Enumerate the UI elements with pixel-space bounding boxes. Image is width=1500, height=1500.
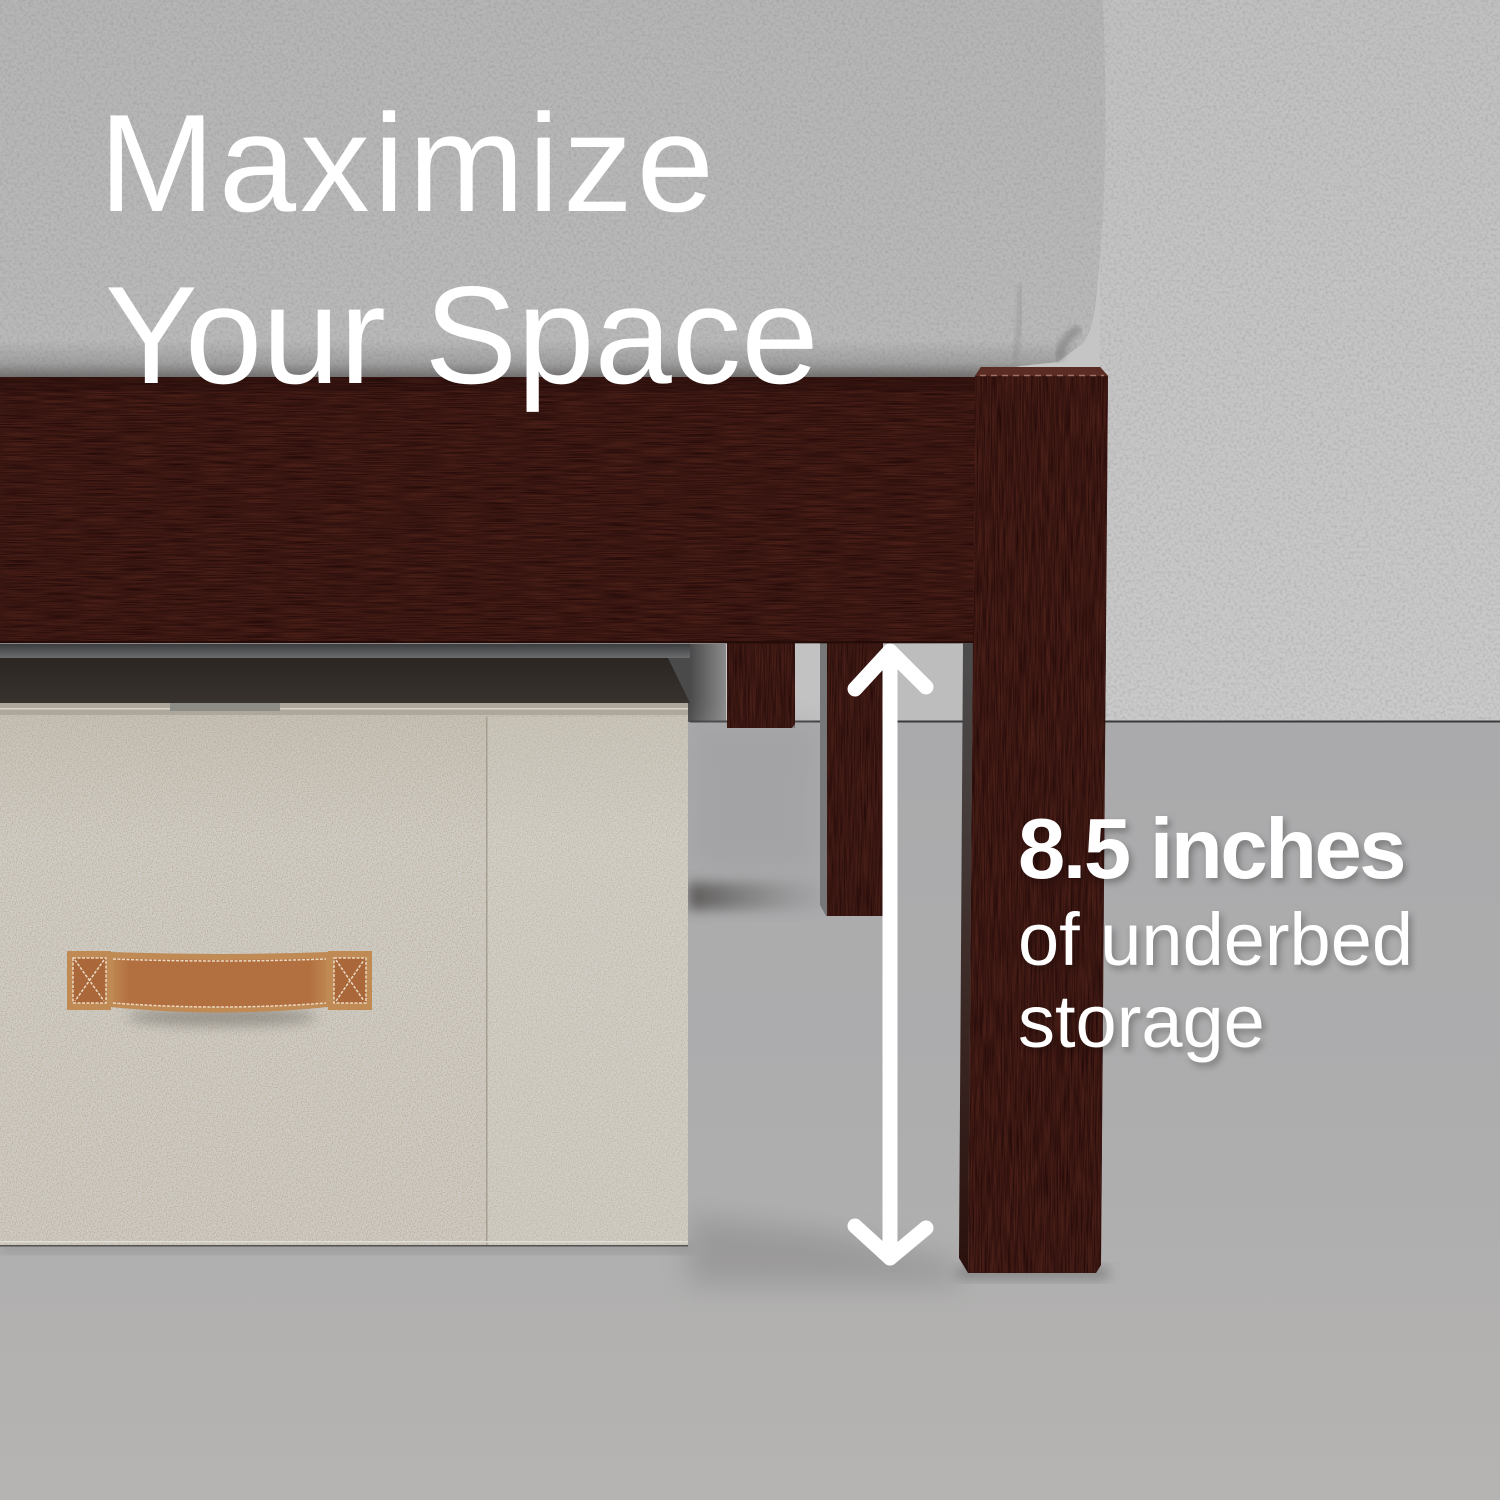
far bed legs bbox=[727, 640, 883, 916]
height arrow bbox=[855, 651, 926, 1258]
callout description line 2: storage bbox=[1018, 980, 1265, 1063]
floor bbox=[0, 720, 1500, 1500]
leather handle bbox=[67, 951, 372, 1026]
title bbox=[99, 86, 819, 413]
title line 2: Your Space bbox=[105, 258, 819, 413]
title line 1: Maximize bbox=[99, 86, 718, 241]
callout figure: 8.5 inches bbox=[1018, 802, 1404, 897]
wall bbox=[0, 0, 1500, 722]
storage box bbox=[0, 644, 690, 1246]
callout description line 1: of underbed bbox=[1018, 898, 1413, 981]
callout: underbed storage bbox=[1018, 802, 1414, 1070]
bed rail bbox=[0, 377, 976, 644]
mattress bbox=[0, 0, 1105, 378]
front bed leg bbox=[959, 367, 1108, 1273]
floor shadows bbox=[0, 722, 1108, 1285]
